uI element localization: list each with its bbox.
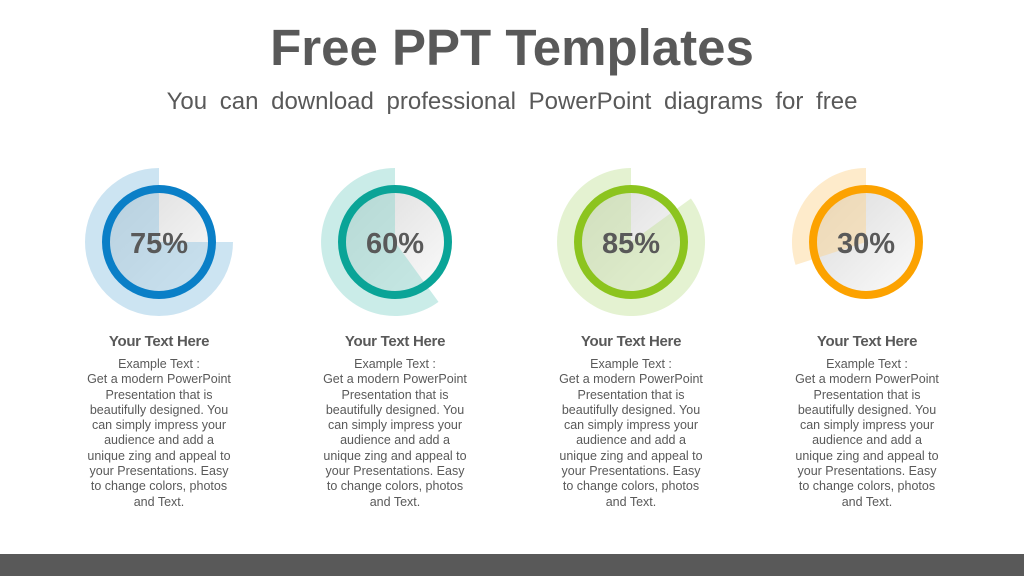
text block 3: to change colors, photos (563, 479, 699, 493)
text block 1: beautifully designed. You (90, 403, 228, 417)
text block 4: your Presentations. Easy (798, 464, 936, 478)
text block 1: Presentation that is (105, 388, 212, 402)
text block 1: your Presentations. Easy (90, 464, 228, 478)
text block 2: your Presentations. Easy (326, 464, 464, 478)
chart: 75%: 75% (130, 228, 188, 260)
text block 3: audience and add a (576, 433, 686, 447)
title: Free PPT Templates (270, 19, 754, 76)
text block 4: audience and add a (812, 433, 922, 447)
text block 2: can simply impress your (328, 418, 462, 432)
text block 4: and Text. (842, 495, 892, 509)
text block 1: unique zing and appeal to (87, 449, 231, 463)
text block 3: Get a modern PowerPoint (559, 372, 703, 386)
text block 2: audience and add a (340, 433, 450, 447)
text block 4: unique zing and appeal to (795, 449, 939, 463)
text block 3: beautifully designed. You (562, 403, 700, 417)
chart: 60%: 60% (366, 228, 424, 260)
chart: 85%: 85% (602, 228, 660, 260)
text block 3: Presentation that is (577, 388, 684, 402)
text block 3 (559, 333, 703, 509)
text block 2: Get a modern PowerPoint (323, 372, 467, 386)
text block 4: Presentation that is (813, 388, 920, 402)
text block 4: beautifully designed. You (798, 403, 936, 417)
chart: 60% (321, 168, 448, 316)
text block 2: Example Text : (354, 357, 436, 371)
footer bar (0, 554, 1024, 576)
text block 1: audience and add a (104, 433, 214, 447)
text block 3: can simply impress your (564, 418, 698, 432)
text block 1: Your Text Here (109, 333, 209, 350)
text block 2: and Text. (370, 495, 420, 509)
text block 1 (87, 333, 231, 509)
text block 1: can simply impress your (92, 418, 226, 432)
text block 3: Example Text : (590, 357, 672, 371)
subtitle: You can download professional PowerPoint diagrams for free (167, 88, 857, 115)
chart: 85% (557, 168, 705, 316)
text block 2: Presentation that is (341, 388, 448, 402)
text block 4: to change colors, photos (799, 479, 935, 493)
text block 3: and Text. (606, 495, 656, 509)
text block 3: unique zing and appeal to (559, 449, 703, 463)
text block 3: Your Text Here (581, 333, 681, 350)
text block 4: Get a modern PowerPoint (795, 372, 939, 386)
text block 2: unique zing and appeal to (323, 449, 467, 463)
text block 4: Your Text Here (817, 333, 917, 350)
text block 4 (795, 333, 939, 509)
text block 1: to change colors, photos (91, 479, 227, 493)
chart: 30%: 30% (837, 228, 895, 260)
chart: 75% (85, 168, 233, 316)
text block 4: can simply impress your (800, 418, 934, 432)
text block 2 (323, 333, 467, 509)
text block 2: beautifully designed. You (326, 403, 464, 417)
text block 1: and Text. (134, 495, 184, 509)
text block 3: your Presentations. Easy (562, 464, 700, 478)
text block 2: to change colors, photos (327, 479, 463, 493)
text block 2: Your Text Here (345, 333, 445, 350)
text block 1: Get a modern PowerPoint (87, 372, 231, 386)
chart: 30% (792, 168, 919, 295)
text block 1: Example Text : (118, 357, 200, 371)
text block 4: Example Text : (826, 357, 908, 371)
